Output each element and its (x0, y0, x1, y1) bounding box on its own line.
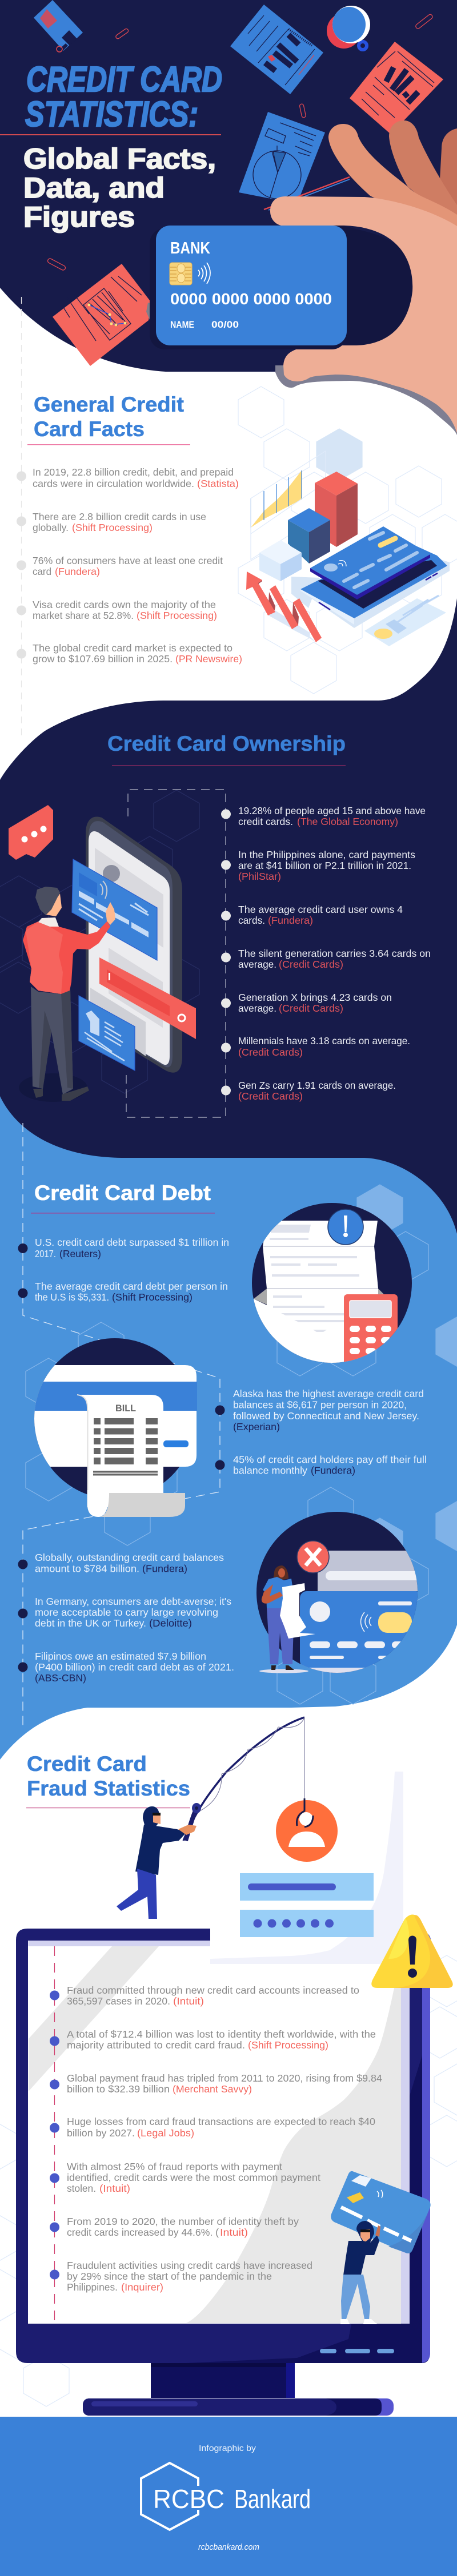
ownership stat 3 (221, 904, 403, 926)
debt stat 3: (Experian) (233, 1421, 280, 1432)
icon: paperclip (415, 14, 434, 30)
heading: credit card fraud statistics (26, 1752, 190, 1808)
monitor shadow bands (29, 1946, 401, 2323)
debt stat 2: The average credit card debt per person in (35, 1281, 228, 1292)
footer band (0, 2417, 457, 2576)
fraud stat 7 (50, 2260, 312, 2293)
fact 4: Visa credit cards own the majority of the (33, 599, 216, 610)
title (0, 60, 222, 233)
fraud stat 2: (Shift Processing) (248, 2039, 328, 2051)
fact 4: market share at 52.8%. (33, 610, 134, 621)
title: Global Facts, (23, 143, 216, 175)
sweater (23, 921, 110, 994)
fact 2: There are 2.8 billion credit cards in use (33, 511, 206, 522)
debt stat 3 (215, 1388, 424, 1432)
debt stat 6 (18, 1596, 231, 1629)
heading: credit card fraud statistics: Credit Card (27, 1752, 147, 1776)
heading: credit card fraud statistics: Fraud Statistics (27, 1777, 190, 1800)
hand holding card (270, 120, 457, 435)
stolen card (331, 2171, 431, 2253)
fraud stat 1: Fraud committed through new credit card accounts increased to (67, 1985, 359, 1996)
debt stat 1: U.S. credit card debt surpassed $1 trillion in (35, 1237, 229, 1248)
collar (38, 917, 59, 927)
heading: credit card ownership: Credit Card Ownership (107, 732, 346, 755)
fact 5: (PR Newswire) (175, 653, 242, 665)
hexagon background: debt (26, 1185, 457, 1704)
debt stat 7: (P400 billion) in credit card debt as of 2021. (35, 1661, 234, 1673)
fraud stat 2: A total of $712.4 billion was lost to identity theft worldwide, with the (67, 2028, 376, 2040)
ownership stat 1: 19.28% of people aged 15 and above have (238, 805, 426, 816)
debt stat 7 (18, 1651, 234, 1684)
ownership stat 4: average. (238, 959, 276, 970)
fraud stat 7: Fraudulent activities using credit cards have increased (67, 2260, 312, 2271)
debt stat 2: (Shift Processing) (112, 1291, 193, 1303)
debt stat 5: (Fundera) (142, 1563, 187, 1575)
bill paper (77, 1395, 185, 1517)
fact 3: 76% of consumers have at least one credit (33, 555, 223, 566)
fact 2: (Shift Processing) (72, 522, 153, 533)
contactless waves (198, 263, 210, 284)
chat bubble (9, 805, 53, 860)
debt stat 6: In Germany, consumers are debt-averse; it's (35, 1596, 231, 1607)
debt stat 7: Filipinos owe an estimated $7.9 billion (35, 1651, 206, 1662)
card name: NAME (170, 319, 194, 330)
debt stat 6: more acceptable to carry large revolving (35, 1607, 218, 1618)
man figure (19, 887, 115, 1102)
title: CREDIT CARD (26, 60, 222, 99)
light cube (259, 540, 302, 581)
icon: magnifying glass (327, 6, 370, 50)
fact 3 (17, 555, 223, 577)
login form fields (240, 1873, 374, 1937)
ownership stat 3: (Fundera) (268, 915, 313, 926)
icon: calculator sheet (34, 0, 83, 52)
fact 1: (Statista) (197, 478, 239, 489)
debt stat 1: (Reuters) (59, 1248, 101, 1259)
fraud stat 3: billion to $32.39 billion (67, 2083, 170, 2095)
icon: pen (264, 177, 350, 210)
heading: general credit card facts: Card Facts (34, 417, 145, 441)
hair (35, 887, 60, 915)
fact 5: The global credit card market is expected to (33, 642, 232, 654)
illustration: declined card with woman holding bill (251, 1512, 423, 1676)
background: ownership section (0, 598, 457, 1234)
title: Figures (23, 201, 135, 233)
fact 2 (17, 511, 206, 533)
fact 4 (17, 599, 217, 621)
fraud stat 1: 365,597 cases in 2020. (67, 1995, 170, 2007)
hexagon background: ownership (0, 790, 199, 1093)
trousers (31, 987, 89, 1101)
ownership stat 1 (221, 805, 426, 827)
fraud stat 2 (50, 2028, 376, 2051)
fact 3: card (33, 566, 51, 577)
debt stat 1: 2017. (35, 1248, 56, 1259)
icon: blue report page (230, 5, 323, 94)
bill paper: BILL (115, 1403, 136, 1414)
monitor stand (83, 2363, 394, 2416)
area chart (251, 451, 326, 560)
fraud stat 4: billion by 2027. (67, 2127, 135, 2139)
card number: 0000 0000 0000 0000 (170, 290, 332, 308)
fraud stat 4 (50, 2116, 375, 2139)
fraud stat 5: identified, credit cards were the most common payment (67, 2172, 320, 2183)
fact 1: In 2019, 22.8 billion credit, debit, and prepaid (33, 466, 234, 478)
fraud stat 5: stolen. (67, 2183, 96, 2194)
fishing rod (183, 1717, 306, 1841)
heading: general credit card facts: General Credit (34, 393, 184, 416)
debt stat 5: Globally, outstanding credit card balances (35, 1552, 224, 1563)
receipt (364, 595, 446, 646)
monitor buttons (320, 2349, 394, 2353)
fraud stat 4: Huge losses from card fraud transactions are expected to reach $40 (67, 2116, 375, 2127)
debt stat 3: balances at $6,617 per person in 2020, (233, 1399, 407, 1410)
fraud stat 6: credit cards increased by 44.6%. ( (67, 2227, 219, 2238)
fact 5 (17, 642, 242, 665)
logo: RCBC Bankard (141, 2463, 311, 2530)
fraud stat 5: With almost 25% of fraud reports with payment (67, 2161, 282, 2172)
debt stat 6: debt in the UK or Turkey. (35, 1617, 146, 1629)
icon: paperclip (47, 257, 66, 271)
debt stat 6: (Deloitte) (149, 1617, 192, 1629)
ownership stat 3: cards. (238, 915, 265, 926)
dashed frame (126, 790, 226, 1117)
fact 3: (Fundera) (55, 566, 100, 577)
thief carrying credit card (331, 2171, 431, 2324)
ownership stat 7: (Credit Cards) (238, 1090, 303, 1102)
heading: general credit card facts (27, 393, 190, 445)
hexagon background: fraud (0, 1955, 457, 2406)
illustration: bill (29, 1338, 197, 1517)
fraud stat 3 (50, 2072, 382, 2095)
ownership stat 6: Millennials have 3.18 cards on average. (238, 1035, 410, 1046)
fact 2: globally. (33, 522, 69, 533)
red arrow (246, 571, 322, 642)
ownership stat 2: (PhilStar) (238, 871, 281, 882)
fraud stat 6 (50, 2216, 299, 2238)
hand (106, 902, 115, 925)
ownership stat 4 (221, 948, 431, 970)
fraud stat 1: (Intuit) (173, 1995, 204, 2007)
ownership stat 7 (221, 1080, 396, 1102)
footer: website: rcbcbankard.com (198, 2542, 259, 2552)
logo: RCBC Bankard: RCBC (153, 2484, 225, 2514)
blue bar (288, 508, 330, 564)
background: hero (0, 0, 457, 372)
ownership stat 3: The average credit card user owns 4 (238, 904, 403, 915)
heading: credit card debt: Credit Card Debt (34, 1181, 211, 1205)
fraud stat 5: (Intuit) (99, 2183, 130, 2194)
product card (79, 996, 135, 1070)
logo: RCBC Bankard: Bankard (234, 2484, 311, 2514)
warning sign (371, 1915, 453, 1988)
footer: infographic credit: Infographic by (199, 2444, 256, 2453)
ownership stat 6 (221, 1035, 410, 1058)
fraud stat 7: Philippines. (67, 2281, 118, 2293)
woman (259, 1565, 315, 1673)
icon: paperclip (115, 28, 129, 39)
ownership stat 2: are at $41 billion or P2.1 trillion in 2021. (238, 860, 411, 871)
debt stat 5 (18, 1552, 224, 1575)
illustration: overdue notice and calculator (251, 1203, 412, 1374)
debt stat 1 (18, 1237, 229, 1259)
debt stat 2: the U.S is $5,331. (35, 1291, 109, 1303)
fact 1 (17, 466, 239, 489)
dashed path through debt section (23, 1123, 220, 1726)
debt stat 5: amount to $784 billion. (35, 1563, 139, 1575)
debt stat 7: (ABS-CBN) (35, 1672, 86, 1684)
title: Data, and (23, 172, 165, 204)
alert badge (328, 1209, 363, 1245)
fraud stat 7: (Inquirer) (121, 2281, 163, 2293)
red bar (315, 472, 358, 547)
background: debt section (0, 1085, 457, 1760)
debt stat 4: (Fundera) (311, 1465, 355, 1476)
fraud stat 3: (Merchant Savvy) (173, 2083, 252, 2095)
ownership stat 1: (The Global Economy) (297, 816, 398, 827)
phone illustration (72, 816, 196, 1073)
debt stat 4: 45% of credit card holders pay off their full (233, 1454, 427, 1465)
fraud stat 7: by 29% since the start of the pandemic in the (67, 2271, 272, 2282)
fraud stat 3: Global payment fraud has tripled from 2011 to 2020, rising from $9.84 (67, 2072, 382, 2084)
icon: pie chart page (239, 112, 325, 204)
debt stat 4: balance monthly (233, 1465, 307, 1476)
blue card on screen (72, 859, 157, 960)
fisherman hacker (108, 1806, 197, 1929)
card expiry: 00/00 (211, 319, 239, 330)
fraud stat 2: majority attributed to credit card fraud. (67, 2039, 245, 2051)
ownership stat 5: average. (238, 1003, 276, 1014)
fraud stat 6: From 2019 to 2020, the number of identity theft by (67, 2216, 299, 2227)
ownership stat 4: The silent generation carries 3.64 cards on (238, 948, 431, 959)
fraud stat 4: (Legal Jobs) (137, 2127, 194, 2139)
ownership stat 2 (221, 849, 415, 882)
monitor (16, 1929, 430, 2416)
ownership stat 5: Generation X brings 4.23 cards on (238, 992, 392, 1003)
icon: red bar chart page (350, 42, 443, 134)
face (46, 893, 62, 916)
fraud stat 1 (50, 1985, 359, 2007)
hexagon background: general facts (238, 387, 457, 694)
ownership stat 5 (221, 992, 392, 1014)
title: STATISTICS: (25, 95, 198, 134)
fraud stat 6: Intuit) (220, 2227, 248, 2238)
user avatar on hook (276, 1800, 338, 1862)
search bar (99, 957, 196, 1039)
ownership stat 7: Gen Zs carry 1.91 cards on average. (238, 1080, 396, 1091)
ownership stat 5: (Credit Cards) (279, 1003, 343, 1014)
ownership stat 1: credit cards. (238, 816, 293, 827)
debt stat 4 (215, 1454, 427, 1476)
card chip (170, 263, 192, 285)
fraud stat 5 (50, 2161, 320, 2194)
fact 4: (Shift Processing) (137, 610, 217, 621)
declined badge (297, 1541, 329, 1573)
fact 5: grow to $107.69 billion in 2025. (33, 653, 173, 665)
ownership stat 2: In the Philippines alone, card payments (238, 849, 415, 860)
phone base and cards (300, 526, 450, 628)
debt stat 2 (18, 1281, 228, 1303)
credit card (150, 226, 347, 349)
login page behind monitor (210, 1772, 403, 1964)
debt stat 3: followed by Connecticut and New Jersey. (233, 1410, 419, 1422)
fact 1: cards were in circulation worldwide. (33, 478, 194, 489)
illustration: isometric bars, card and arrow (246, 451, 450, 646)
card bank name: BANK (170, 239, 210, 257)
debt stat 3: Alaska has the highest average credit card (233, 1388, 424, 1399)
icon: paperclip (299, 103, 306, 118)
ownership stat 6: (Credit Cards) (238, 1046, 303, 1058)
icon: red chart page (53, 264, 152, 366)
ownership stat 4: (Credit Cards) (279, 959, 343, 970)
